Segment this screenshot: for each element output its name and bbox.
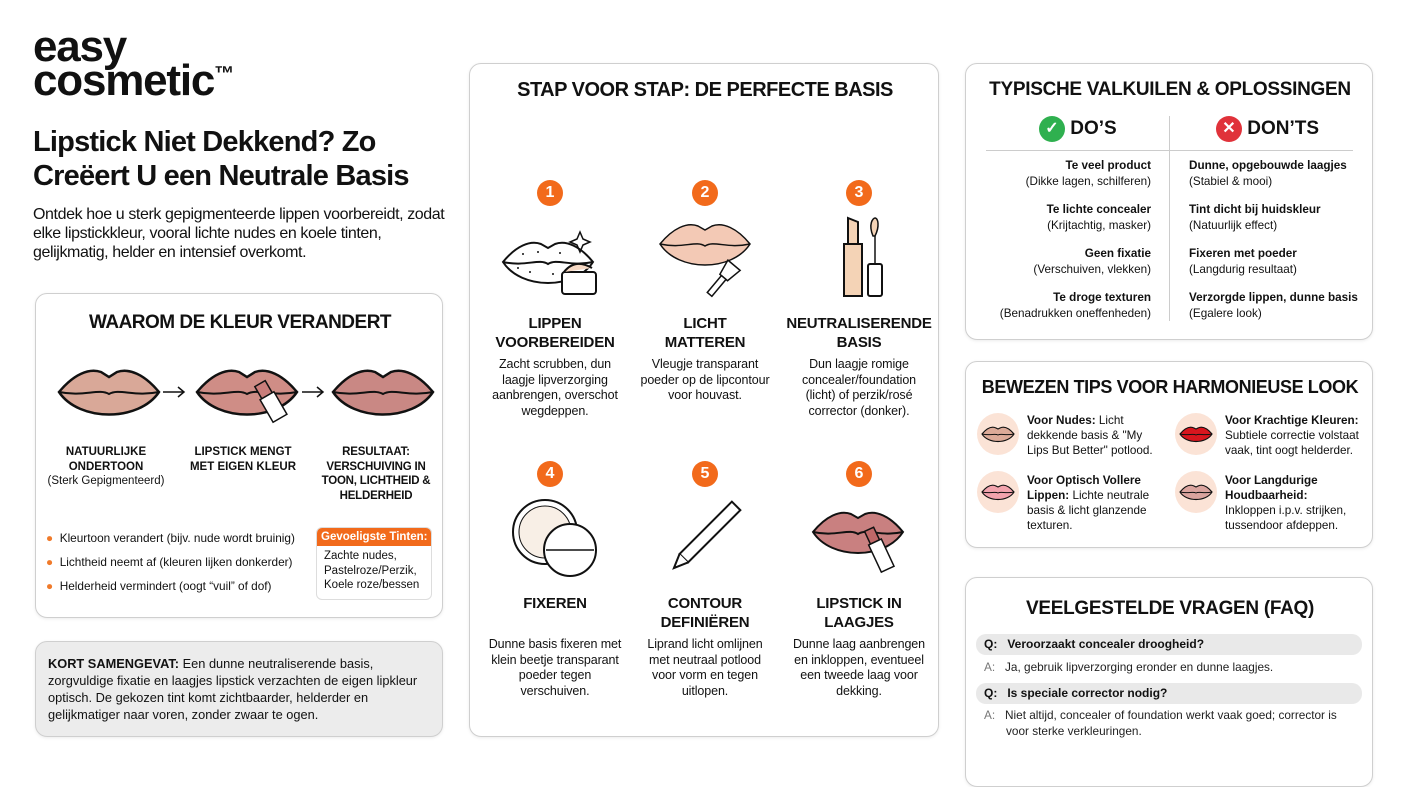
label 1 <box>48 446 164 487</box>
step 1 text: LIPPEN <box>528 315 581 332</box>
do's list: Geen fixatie <box>1085 247 1151 260</box>
do's list <box>1000 159 1151 320</box>
panel: FAQ: A: Ja, gebruik lipverzorging eronder en dunne laagjes. <box>984 660 1273 674</box>
panel: FAQ: A: Niet altijd, concealer of foundation werkt vaak goed; corrector is voor sterke verkleuringen. <box>984 708 1337 738</box>
step 2 text: MATTEREN <box>665 334 745 351</box>
step 3 text: BASIS <box>837 334 881 351</box>
title: Lipstick Niet Dekkend? Zo <box>33 126 376 158</box>
tip: houdbaarheid: Inkloppen i.p.v. strijken, tussendoor afdeppen. <box>1225 504 1346 532</box>
bullet list: ● Helderheid vermindert (oogt “vuil” of dof) <box>46 579 271 593</box>
do's list: Te droge texturen <box>1053 291 1151 304</box>
panel: stap voor stap: Dun laagje romige concealer/foundation (licht) of perzik/rosé corrector (donker). <box>802 357 916 418</box>
don'ts list: (Langdurig resultaat) <box>1189 262 1297 276</box>
don'ts header: ✕ <box>1222 120 1236 137</box>
logo: cosmetic™ <box>33 56 233 105</box>
title: Creëert U een Neutrale Basis <box>33 160 409 192</box>
faq 2: Q: Is speciale corrector nodig? <box>984 686 1167 700</box>
callout: gevoeligste tinten: Gevoeligste Tinten: <box>321 531 428 543</box>
bullet list: ● Kleurtoon verandert (bijv. nude wordt bruinig) <box>46 531 295 545</box>
step 3 <box>846 180 872 206</box>
panel: stap voor stap: Zacht scrubben, dun laagje lipverzorging aanbrengen, overschot wegdeppen. <box>492 357 618 418</box>
callout: gevoeligste tinten: Zachte nudes, <box>324 550 397 562</box>
panel: valkuilen & oplossingen <box>965 63 1373 340</box>
tip: vollere lippen: Voor Optisch Vollere Lippen: Lichte neutrale basis & licht glanzende texturen. <box>1027 474 1149 532</box>
label 1: ONDERTOON <box>69 460 143 472</box>
label 3: TOON, LICHTHEID & <box>322 475 430 487</box>
panel: kort samengevat <box>35 641 443 737</box>
tip: nudes: Voor Nudes: Licht dekkende basis & "My Lips But Better" potlood. <box>1027 414 1153 457</box>
step 5 text: DEFINIËREN <box>661 614 749 631</box>
panel: stap voor stap: Dunne basis fixeren met klein beetje transparant poeder tegen verschuiven. <box>489 637 621 698</box>
don'ts list <box>1189 159 1358 320</box>
do's header: DO’S <box>1070 118 1117 139</box>
faq 2 <box>976 683 1362 704</box>
do's list: (Krijtachtig, masker) <box>1047 218 1151 232</box>
don'ts list: (Natuurlijk effect) <box>1189 218 1277 232</box>
step 5 text: CONTOUR <box>668 595 742 612</box>
panel: stap voor stap: Vleugje transparant poeder op de lipcontour voor houvast. <box>640 357 770 402</box>
label 3: RESULTAAT: <box>342 446 410 458</box>
label 2: LIPSTICK MENGT <box>194 446 292 458</box>
heading: VEELGESTELDE VRAGEN (FAQ) <box>1026 598 1314 619</box>
step 4 <box>537 461 563 487</box>
do's list: (Verschuiven, vlekken) <box>1033 262 1151 276</box>
panel: stap voor stap <box>469 63 939 737</box>
step 3 text <box>786 315 932 351</box>
heading: STAP VOOR STAP: DE PERFECTE BASIS <box>517 79 893 101</box>
step 2 text <box>665 315 745 351</box>
panel: waarom de kleur verandert <box>35 293 443 618</box>
step 2: 2 <box>701 184 709 201</box>
bullet list: ● Lichtheid neemt af (kleuren lijken donkerder) <box>46 555 292 569</box>
step 6 text: LAAGJES <box>824 614 894 631</box>
step 1 text <box>495 315 615 351</box>
callout: gevoeligste tinten <box>316 527 432 600</box>
step 6: 6 <box>855 465 863 482</box>
tip icons <box>977 413 1217 513</box>
label 1: (Sterk Gepigmenteerd) <box>48 475 164 487</box>
step 6 text: LIPSTICK IN <box>816 595 902 612</box>
bullet list <box>46 531 295 593</box>
step 4: 4 <box>546 465 554 482</box>
lip diagram <box>58 370 434 424</box>
don'ts list: Tint dicht bij huidskleur <box>1189 203 1321 216</box>
step 2 <box>692 180 718 206</box>
label 2: MET EIGEN KLEUR <box>190 460 296 472</box>
step 1 text: VOORBEREIDEN <box>495 334 615 351</box>
step 3: 3 <box>855 184 863 201</box>
title <box>33 126 409 192</box>
tip: houdbaarheid: Voor Langdurige Houdbaarheid: <box>1225 474 1318 502</box>
panel: stap voor stap: Liprand licht omlijnen met neutraal potlood voor vorm en tegen uitlopen. <box>647 637 763 698</box>
don'ts list: Dunne, opgebouwde laagjes <box>1189 159 1347 172</box>
step 1 <box>537 180 563 206</box>
do's list: (Dikke lagen, schilferen) <box>1026 174 1151 188</box>
panel: stap voor stap: Dunne laag aanbrengen en inkloppen, eventueel een tweede laag voor dekking. <box>793 637 925 698</box>
label 3: HELDERHEID <box>340 490 412 502</box>
heading: WAAROM DE KLEUR VERANDERT <box>89 312 391 333</box>
don'ts list: (Stabiel & mooi) <box>1189 174 1272 188</box>
heading: TYPISCHE VALKUILEN & OPLOSSINGEN <box>989 79 1351 100</box>
don'ts list: (Egalere look) <box>1189 306 1262 320</box>
panel: FAQ <box>965 577 1373 787</box>
step 5 text <box>661 595 749 631</box>
label 3 <box>322 446 430 502</box>
don'ts list: Fixeren met poeder <box>1189 247 1297 260</box>
step 4 text: FIXEREN <box>523 595 587 612</box>
faq 1: Q: Veroorzaakt concealer droogheid? <box>984 637 1204 651</box>
callout: gevoeligste tinten: Koele roze/bessen <box>324 579 419 591</box>
tip: houdbaarheid <box>1225 474 1346 532</box>
intro text: Ontdek hoe u sterk gepigmenteerde lippen voorbereidt, zodat elke lipstickkleur, vooral lichte nudes en koele tinten, gelijkmatig, helder en intensief overkomt. <box>33 206 444 261</box>
do's list: Te lichte concealer <box>1047 203 1151 216</box>
step 3 text: NEUTRALISERENDE <box>786 315 932 332</box>
do's header <box>1039 116 1117 142</box>
logo: easy <box>33 22 126 71</box>
label 3: VERSCHUIVING IN <box>326 460 426 472</box>
step 5 <box>692 461 718 487</box>
tip: krachtige kleuren: Voor Krachtige Kleuren: Subtiele correctie volstaat vaak, tint oogt helderder. <box>1225 414 1359 457</box>
panel: kort samengevat: KORT SAMENGEVAT: Een dunne neutraliserende basis, zorgvuldige fixatie en laagjes lipstick verzachten de eigen lipkleur optisch. De gekozen tint komt zichtbaarder, helderder en gelijkmatiger naar voren, zonder zwaar te ogen. <box>48 656 417 722</box>
step 6 text <box>816 595 902 631</box>
don'ts header: DON’TS <box>1247 118 1319 139</box>
don'ts list: Verzorgde lippen, dunne basis <box>1189 291 1358 304</box>
callout: gevoeligste tinten: Pastelroze/Perzik, <box>324 564 417 576</box>
do's header: ✓ <box>1045 120 1059 137</box>
label 2 <box>190 446 296 472</box>
do's list: (Benadrukken oneffenheden) <box>1000 306 1151 320</box>
step 5: 5 <box>701 465 709 482</box>
step 6 <box>846 461 872 487</box>
label 1: NATUURLIJKE <box>66 446 146 458</box>
step 1: 1 <box>546 184 554 201</box>
faq 1 <box>976 634 1362 655</box>
panel: bewezen tips <box>965 361 1373 548</box>
step 2 text: LICHT <box>683 315 727 332</box>
do's list: Te veel product <box>1065 159 1151 172</box>
heading: BEWEZEN TIPS VOOR HARMONIEUSE LOOK <box>982 377 1358 397</box>
logo <box>33 22 233 105</box>
don'ts header <box>1216 116 1319 142</box>
